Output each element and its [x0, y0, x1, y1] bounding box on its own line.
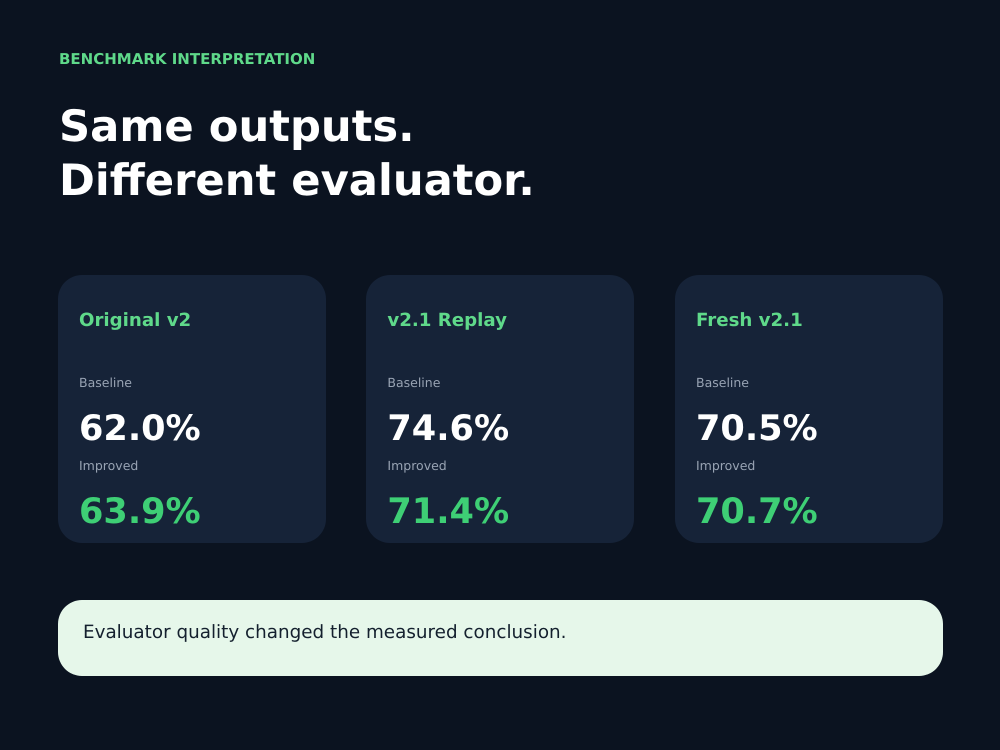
improved value: 70.7%: [696, 491, 818, 532]
panel: v2.1 Replay: [366, 275, 634, 543]
baseline label: Baseline: [696, 375, 749, 390]
callout: [58, 600, 943, 676]
panel: Fresh v2.1: [675, 275, 943, 543]
baseline label: Baseline: [79, 375, 132, 390]
card heading: Fresh v2.1: [696, 310, 803, 331]
improved value: 71.4%: [387, 491, 509, 532]
title: Same outputs.: [59, 102, 415, 152]
panel: Original v2: [58, 275, 326, 543]
title: Different evaluator.: [59, 156, 535, 206]
eyebrow label: BENCHMARK INTERPRETATION: [59, 50, 315, 68]
title: [59, 102, 535, 206]
card heading: Original v2: [79, 310, 191, 331]
improved label: Improved: [79, 458, 138, 473]
improved label: Improved: [696, 458, 755, 473]
improved value: 63.9%: [79, 491, 201, 532]
card heading: v2.1 Replay: [387, 310, 507, 331]
baseline value: 74.6%: [387, 408, 509, 449]
improved label: Improved: [387, 458, 447, 473]
callout text: Evaluator quality changed the measured conclusion.: [83, 622, 566, 643]
baseline value: 62.0%: [79, 408, 201, 449]
baseline value: 70.5%: [696, 408, 818, 449]
baseline label: Baseline: [387, 375, 440, 390]
